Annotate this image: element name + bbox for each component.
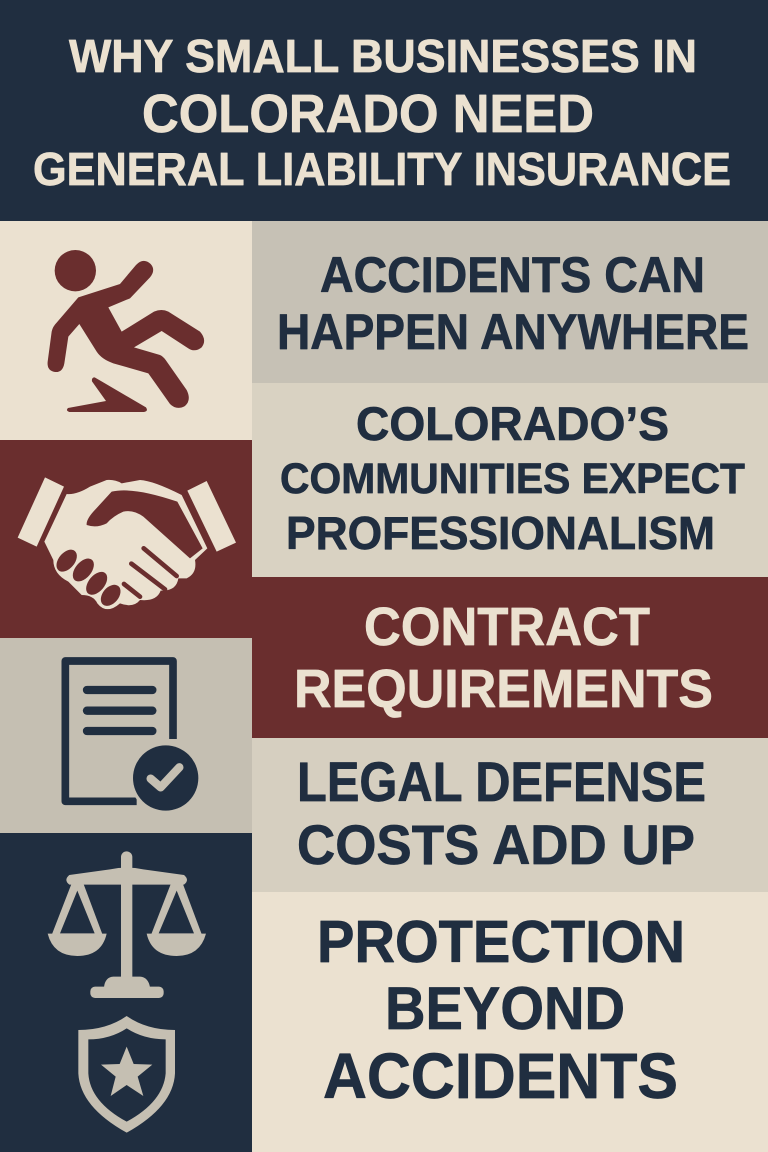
heading: contract requirements: REQUIREMENTS (294, 659, 713, 719)
panel: contract icon tile (0, 638, 252, 833)
panel: accidents can happen anywhere (252, 221, 768, 383)
title (33, 30, 731, 195)
heading: contract requirements (294, 597, 713, 719)
heading: professionalism (280, 397, 745, 559)
heading: legal defense (297, 750, 706, 876)
title: WHY SMALL BUSINESSES IN (69, 30, 697, 82)
panel: slip icon tile (0, 221, 252, 440)
icon: shield with star (78, 1016, 175, 1133)
panel: legal icons tile (0, 833, 252, 1152)
heading: accidents (277, 247, 749, 360)
icon: person slipping (48, 250, 204, 412)
heading: protection (317, 909, 685, 1112)
heading: contract requirements: CONTRACT (364, 597, 650, 657)
heading: protection: ACCIDENTS (323, 1040, 678, 1112)
heading: professionalism: COLORADO’S (356, 397, 669, 450)
heading: legal defense: COSTS ADD UP (297, 813, 695, 876)
heading: protection: BEYOND (385, 975, 625, 1042)
heading: protection: PROTECTION (317, 909, 685, 975)
icon: handshake (18, 477, 236, 610)
title: COLORADO NEED (142, 84, 594, 144)
heading: professionalism: COMMUNITIES EXPECT (280, 455, 745, 503)
title: GENERAL LIABILITY INSURANCE (33, 143, 731, 195)
panel: legal defense costs (252, 738, 768, 892)
heading: legal defense: LEGAL DEFENSE (297, 750, 706, 813)
heading: accidents: ACCIDENTS CAN (320, 247, 705, 303)
panel: protection beyond accidents (252, 892, 768, 1152)
icon: scales of justice (48, 851, 206, 998)
panel: contract requirements (252, 577, 768, 738)
panel: communities expect professionalism (252, 383, 768, 577)
header panel (0, 0, 768, 221)
heading: professionalism: PROFESSIONALISM (286, 507, 715, 559)
panel: handshake icon tile (0, 440, 252, 638)
icon: document with check mark (65, 661, 202, 814)
